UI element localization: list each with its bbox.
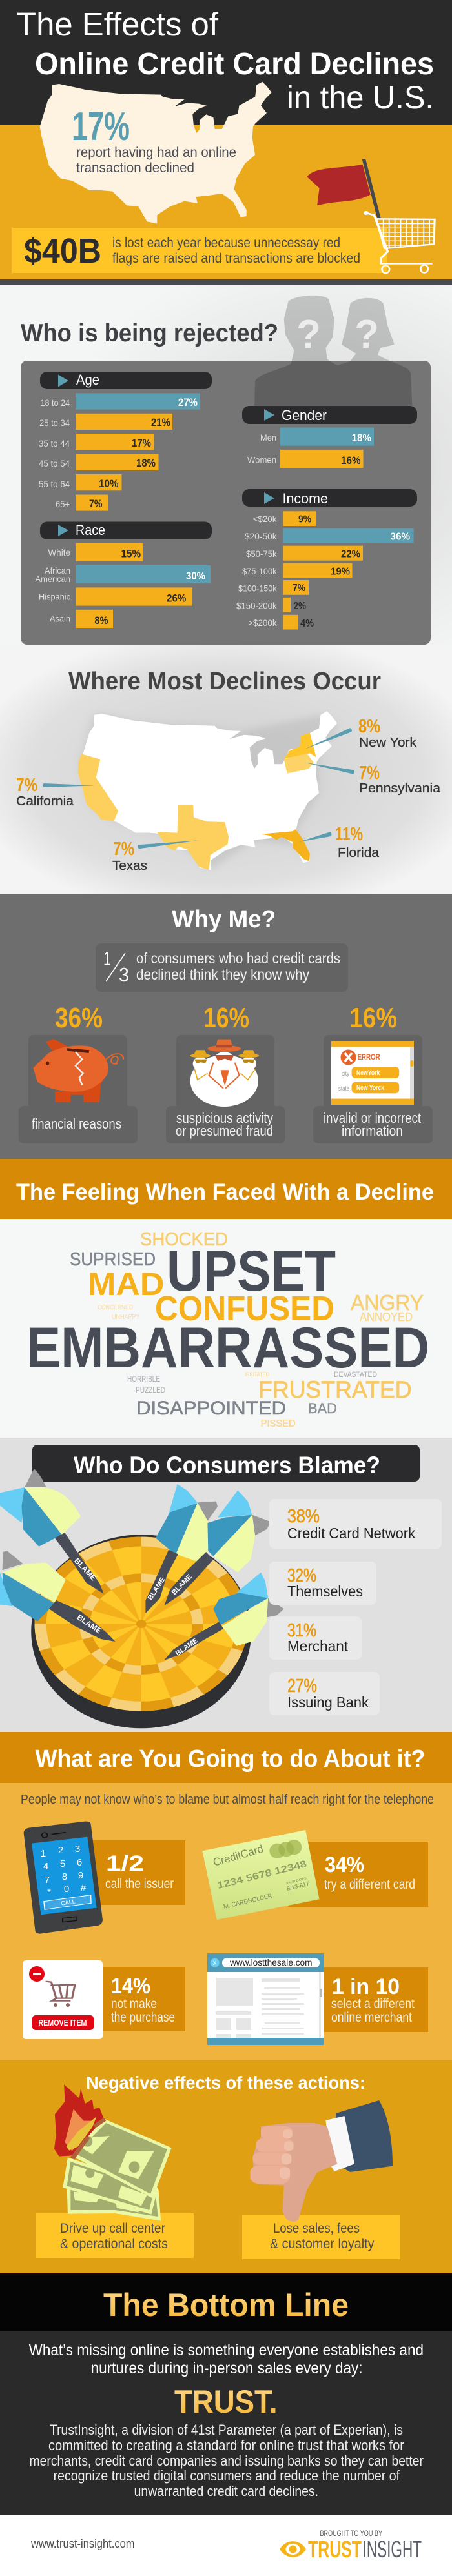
stat: 17 percent: transaction declined <box>76 161 194 176</box>
label: Florida <box>335 824 380 860</box>
icon: question marks <box>296 312 379 357</box>
website url: www.trust-insight.com <box>30 2537 135 2550</box>
stat: merchant: Merchant <box>287 1638 349 1655</box>
chart: race: 8% <box>94 614 108 627</box>
title <box>16 6 434 116</box>
chart: race: 30% <box>186 570 205 582</box>
icon: credit card: M. CARDHOLDER <box>223 1893 273 1911</box>
icon: phone: 9 <box>78 1870 83 1881</box>
footer <box>0 2515 452 2576</box>
panel: negative effects <box>0 2060 452 2273</box>
chart: race: 26% <box>167 592 186 604</box>
panel: why me <box>0 894 452 1159</box>
effect: costs box: Drive up call center <box>60 2221 165 2236</box>
word cloud: PISSED <box>261 1418 296 1429</box>
chart: income: 4% <box>300 618 314 629</box>
chart: gender <box>242 406 417 468</box>
chart: age: 65+ <box>56 499 70 509</box>
callout: one third: declined think they know why <box>136 966 309 983</box>
reason: financial: 36% <box>55 1002 103 1034</box>
label: Pennsylvania <box>359 763 441 796</box>
reason: invalid info: invalid or incorrect <box>324 1110 421 1126</box>
chart: income: $20-50k <box>245 531 278 541</box>
icon: dart 5 <box>164 1573 284 1660</box>
chart: race: African <box>45 565 70 576</box>
heading: The Bottom Line <box>103 2287 349 2323</box>
label: Florida: Florida <box>338 846 380 860</box>
icon: error form: state <box>338 1085 349 1092</box>
icon: credit card: VALID DATES <box>286 1877 307 1886</box>
panel: the bottom line <box>0 2273 452 2515</box>
icon: phone: # <box>81 1882 87 1893</box>
stat: credit card network: 38% <box>287 1506 320 1527</box>
icon: thumbs down <box>250 2100 393 2222</box>
chart: race: Hispanic <box>39 591 70 601</box>
callout: one third: of consumers who had credit cards <box>136 950 340 967</box>
icon: burning money <box>54 2084 172 2221</box>
label: Pennsylvania: 7% <box>359 763 380 783</box>
action: call issuer: call the issuer <box>105 1877 174 1891</box>
effect: loyalty box <box>242 2215 400 2259</box>
icon: phone: 8 <box>62 1871 67 1882</box>
action: different card <box>202 1830 428 1920</box>
effect: loyalty box: Lose sales, fees <box>273 2221 360 2236</box>
icon: error form: city <box>342 1071 349 1078</box>
heading: Who Do Consumers Blame? <box>74 1452 380 1478</box>
chart: gender: Gender <box>282 407 327 423</box>
chart: income: 19% <box>331 567 350 577</box>
heading: Negative effects of these actions: <box>86 2073 365 2093</box>
panel: who do consumers blame <box>0 1438 452 1732</box>
chart: race: Asain <box>50 613 70 623</box>
chart: race <box>35 521 212 628</box>
logo: TrustInsight <box>280 2530 422 2562</box>
reason: invalid info: information <box>342 1123 403 1139</box>
word cloud: DISAPPOINTED <box>136 1398 286 1419</box>
icon: browser window: X <box>213 1960 217 1966</box>
action: not purchase: not make <box>111 1997 157 2011</box>
reason: financial: financial reasons <box>32 1116 121 1132</box>
action: different card: 34% <box>325 1853 364 1877</box>
word cloud: BAD <box>308 1400 337 1416</box>
chart: race: American <box>35 574 70 584</box>
chart: gender: Women <box>247 455 276 465</box>
effect: costs box: & operational costs <box>60 2237 168 2251</box>
action: not purchase: 14% <box>111 1974 150 1998</box>
icon: credit card: 8/13-817 <box>286 1880 310 1892</box>
icon: phone: 3 <box>75 1844 80 1855</box>
icon: phone: 0 <box>64 1884 69 1895</box>
reason: invalid info <box>313 1002 433 1143</box>
reason: suspicious: or presumed fraud <box>176 1123 273 1139</box>
chart: income: $100-150k <box>238 583 277 594</box>
icon: phone: CALL <box>61 1898 76 1907</box>
callout: 40B lost <box>12 228 387 273</box>
icon: question marks: ? <box>296 312 321 357</box>
chart: age: 18 to 24 <box>40 397 70 408</box>
icon: phone: * <box>47 1887 51 1898</box>
label: New York: 8% <box>358 716 380 737</box>
icon: credit card: CreditCard <box>212 1843 265 1869</box>
chart: age: 17% <box>132 437 151 449</box>
chart: income: Income <box>283 490 328 507</box>
chart: age: 10% <box>99 478 119 490</box>
label: California: 7% <box>16 775 37 796</box>
chart: age: Age <box>76 372 99 388</box>
heading: What are You Going to do About it? <box>35 1746 425 1773</box>
stat: merchant: 31% <box>287 1620 316 1641</box>
label: Texas <box>112 839 147 873</box>
icon: credit card <box>202 1830 320 1920</box>
word cloud: ANGRY <box>351 1291 424 1314</box>
action: different merchant: online merchant <box>331 2010 412 2025</box>
word cloud: CONFUSED <box>155 1289 334 1328</box>
icon: dart 3 <box>145 1484 218 1613</box>
label: Texas: 7% <box>113 839 134 860</box>
chart: age: 18% <box>136 457 156 469</box>
chart: income: 9% <box>298 514 311 525</box>
word cloud: PUZZLED <box>136 1385 165 1394</box>
word cloud: CONCERNED <box>98 1303 133 1311</box>
icon: dartboard <box>31 1535 251 1728</box>
chart: gender: Men <box>260 432 276 443</box>
icon: browser window <box>207 1953 324 2045</box>
callout: one third <box>96 943 348 992</box>
panel: feeling heading band: The Feeling When Faced With a Decline <box>16 1180 434 1205</box>
chart: race: Race <box>76 522 105 538</box>
icon: remove item: REMOVE ITEM <box>38 2018 87 2028</box>
reason: suspicious: suspicious activity <box>176 1110 273 1126</box>
panel: header <box>0 0 452 285</box>
icon: red flag in shopping cart <box>307 159 435 273</box>
heading <box>32 1445 420 1482</box>
chart: income: <$20k <box>253 514 277 524</box>
stat: credit card network: Credit Card Network <box>287 1525 415 1542</box>
panel: what are you going to do <box>0 1732 452 2060</box>
heading: Where Most Declines Occur <box>68 668 381 695</box>
panel: who is being rejected <box>0 285 452 645</box>
word cloud: DEVASTATED <box>334 1370 377 1379</box>
word cloud: ANNOYED <box>360 1311 413 1323</box>
icon: dart 5: BLAME <box>174 1636 200 1658</box>
stat: themselves: 32% <box>287 1565 316 1586</box>
reason: suspicious: 16% <box>203 1002 249 1034</box>
word cloud: MAD <box>88 1266 164 1302</box>
stat: merchant <box>269 1616 362 1660</box>
chart: income: $75-100k <box>242 566 278 576</box>
icon: phone <box>24 1822 103 1934</box>
word cloud: UPSET <box>167 1238 336 1303</box>
icon: dart 2: BLAME <box>76 1613 103 1635</box>
icon: error form: ERROR <box>358 1052 380 1062</box>
icon: silhouettes <box>254 296 412 406</box>
map of declines <box>43 711 354 870</box>
chart: age: 7% <box>89 498 102 510</box>
action: not purchase: the purchase <box>111 2010 175 2025</box>
icon: remove item <box>23 1960 103 2039</box>
panel: feeling heading band <box>0 1159 452 1219</box>
label: Pennsylvania: Pennsylvania <box>359 781 441 796</box>
chart panel background <box>21 361 431 645</box>
icon: masked spies <box>190 1040 259 1107</box>
stat: issuing bank <box>269 1672 380 1715</box>
icon: dart 1 <box>0 1469 104 1594</box>
label: Texas: Texas <box>112 859 147 873</box>
chart: gender: 16% <box>341 454 360 467</box>
callout: 40B lost: flags are raised and transactions are blocked <box>112 251 360 266</box>
chart: income: 36% <box>390 531 410 542</box>
panel: where most declines occur <box>0 645 452 894</box>
chart: age: 45 to 54 <box>39 458 70 468</box>
paragraph: TrustInsight, a division of 41st Parameter (a part of Experian), is <box>50 2422 403 2438</box>
icon: phone: 2 <box>58 1845 63 1856</box>
icon: phone: 4 <box>43 1861 48 1872</box>
icon: phone: 1 <box>41 1848 46 1859</box>
paragraph: committed to creating a standard for online trust that works for <box>48 2437 404 2453</box>
stat: themselves <box>269 1562 376 1605</box>
chart: age: 27% <box>178 396 198 408</box>
intro text <box>29 2341 424 2377</box>
label: California <box>16 775 74 809</box>
word cloud: HORRIBLE <box>127 1374 160 1384</box>
action: call issuer <box>24 1822 185 1934</box>
word cloud: SHOCKED <box>140 1229 228 1250</box>
stat: themselves: Themselves <box>287 1583 363 1600</box>
chart: income: >$200k <box>248 618 278 628</box>
label: Florida: 11% <box>335 824 363 845</box>
chart: income: 22% <box>341 549 360 560</box>
word cloud: SUPRISED <box>70 1249 156 1270</box>
action: different merchant: select a different <box>331 1997 415 2011</box>
stat: credit card network <box>269 1499 442 1549</box>
callout: one third: 1 <box>103 947 111 970</box>
chart: age: 21% <box>151 416 170 428</box>
effect: costs box <box>36 2213 194 2258</box>
action: call issuer: 1/2 <box>106 1851 144 1876</box>
icon: credit card: 1234 5678 12348 <box>216 1858 308 1891</box>
stat: issuing bank: 27% <box>287 1676 317 1696</box>
title: in the U.S. <box>287 79 434 116</box>
heading: Why Me? <box>172 906 276 933</box>
chart: age: 25 to 34 <box>39 418 70 428</box>
icon: dart 4 <box>164 1490 271 1605</box>
chart: age: 35 to 44 <box>39 438 70 448</box>
word cloud: FRUSTRATED <box>258 1376 412 1403</box>
logo: TrustInsight: TRUST <box>308 2536 362 2562</box>
effect: loyalty box: & customer loyalty <box>270 2237 375 2251</box>
icon: error form <box>331 1041 414 1105</box>
chart: income: 2% <box>293 601 306 612</box>
word cloud <box>0 1219 452 1438</box>
icon: browser window: www.lostthesale.com <box>229 1957 313 1967</box>
callout: 40B lost: $40B <box>24 232 101 270</box>
chart: income: $150-200k <box>236 600 278 610</box>
chart: race: 15% <box>121 548 141 560</box>
label: California: California <box>16 794 74 809</box>
title: Online Credit Card Declines <box>35 47 434 81</box>
icon: dart 4: BLAME <box>170 1573 194 1596</box>
stat: issuing bank: Issuing Bank <box>287 1694 369 1711</box>
reason: suspicious <box>166 1002 285 1143</box>
logo: TrustInsight: BROUGHT TO YOU BY <box>320 2530 382 2538</box>
stat: 17 percent: report having had an online <box>76 145 236 160</box>
chart: age <box>39 372 212 511</box>
chart: income: 7% <box>293 583 305 594</box>
reason: invalid info: 16% <box>350 1002 397 1034</box>
icon: error form: NewYork <box>356 1069 380 1077</box>
chart: income <box>236 489 417 630</box>
icon: phone: 6 <box>77 1857 82 1868</box>
word cloud: IRRITATED <box>245 1371 269 1378</box>
word cloud: UNHAPPY <box>112 1313 139 1321</box>
icon: US map <box>40 82 272 224</box>
callout: one third: 3 <box>119 963 129 986</box>
icon: dart 2 <box>0 1551 116 1642</box>
chart: race: White <box>48 547 70 558</box>
label: New York <box>358 716 417 750</box>
icon: broken piggy bank <box>33 1039 123 1102</box>
icon: phone: 5 <box>60 1858 65 1869</box>
paragraph: unwarranted credit card declines. <box>134 2483 318 2499</box>
label: New York: New York <box>359 736 417 750</box>
trust callout: TRUST. <box>174 2384 278 2420</box>
paragraph <box>30 2422 424 2499</box>
stat: 17 percent: 17% <box>72 105 130 149</box>
icon: question marks: ? <box>354 312 379 357</box>
stat: 17 percent <box>72 105 236 176</box>
callout: 40B lost: is lost each year because unnecessay red <box>112 236 340 250</box>
icon: phone: 7 <box>45 1875 50 1886</box>
icon: dart 3: BLAME <box>147 1576 167 1602</box>
icon: dart 1: BLAME <box>72 1556 98 1582</box>
action: different merchant <box>207 1953 428 2045</box>
action: different merchant: 1 in 10 <box>332 1975 400 1999</box>
reason: financial <box>19 1002 138 1143</box>
action: not purchase <box>23 1960 185 2039</box>
paragraph: recognize trusted digital consumers and reduce the number of <box>54 2468 400 2484</box>
chart: age: 55 to 64 <box>39 479 70 489</box>
chart: income: $50-75k <box>246 548 278 559</box>
icon: error form: New Yorck <box>356 1084 385 1092</box>
title: The Effects of <box>16 6 219 43</box>
heading: Who is being rejected? <box>21 319 278 347</box>
action: different card: try a different card <box>324 1877 415 1892</box>
intro text: nurtures during in-person sales every day: <box>91 2359 363 2377</box>
chart: gender: 18% <box>352 432 371 444</box>
